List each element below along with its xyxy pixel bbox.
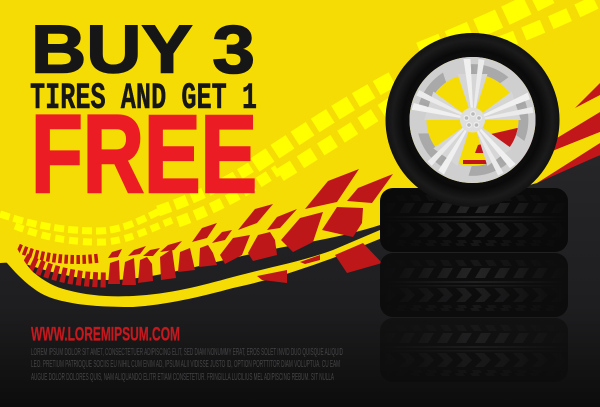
yellow stripe, right [552,132,600,165]
tyre ring [386,33,560,207]
alloy wheel with tyre [386,33,560,207]
spokes and windows [410,59,535,180]
wheel hub bolts [464,112,481,127]
title: free: FREE [31,93,257,216]
title: buy 3: BUY 3 [31,12,255,88]
red tread fragments on dark [257,243,382,283]
body text [31,347,343,383]
red tread pattern [18,169,393,285]
website url: WWW.LOREMIPSUM.COM [31,324,180,346]
stack of tyres [380,188,568,382]
subtitle: TIRES AND GET 1 [30,78,257,120]
rim ring [410,57,536,183]
dark lower background [0,155,600,407]
headline [30,12,257,216]
tyre 2, middle [380,253,568,317]
red diagonal stripes, right [425,83,600,197]
bright yellow tyre track [0,0,600,242]
tyre 3, bottom [380,318,568,382]
tyre 1, top [380,188,568,252]
yellow swoosh band [0,230,382,307]
